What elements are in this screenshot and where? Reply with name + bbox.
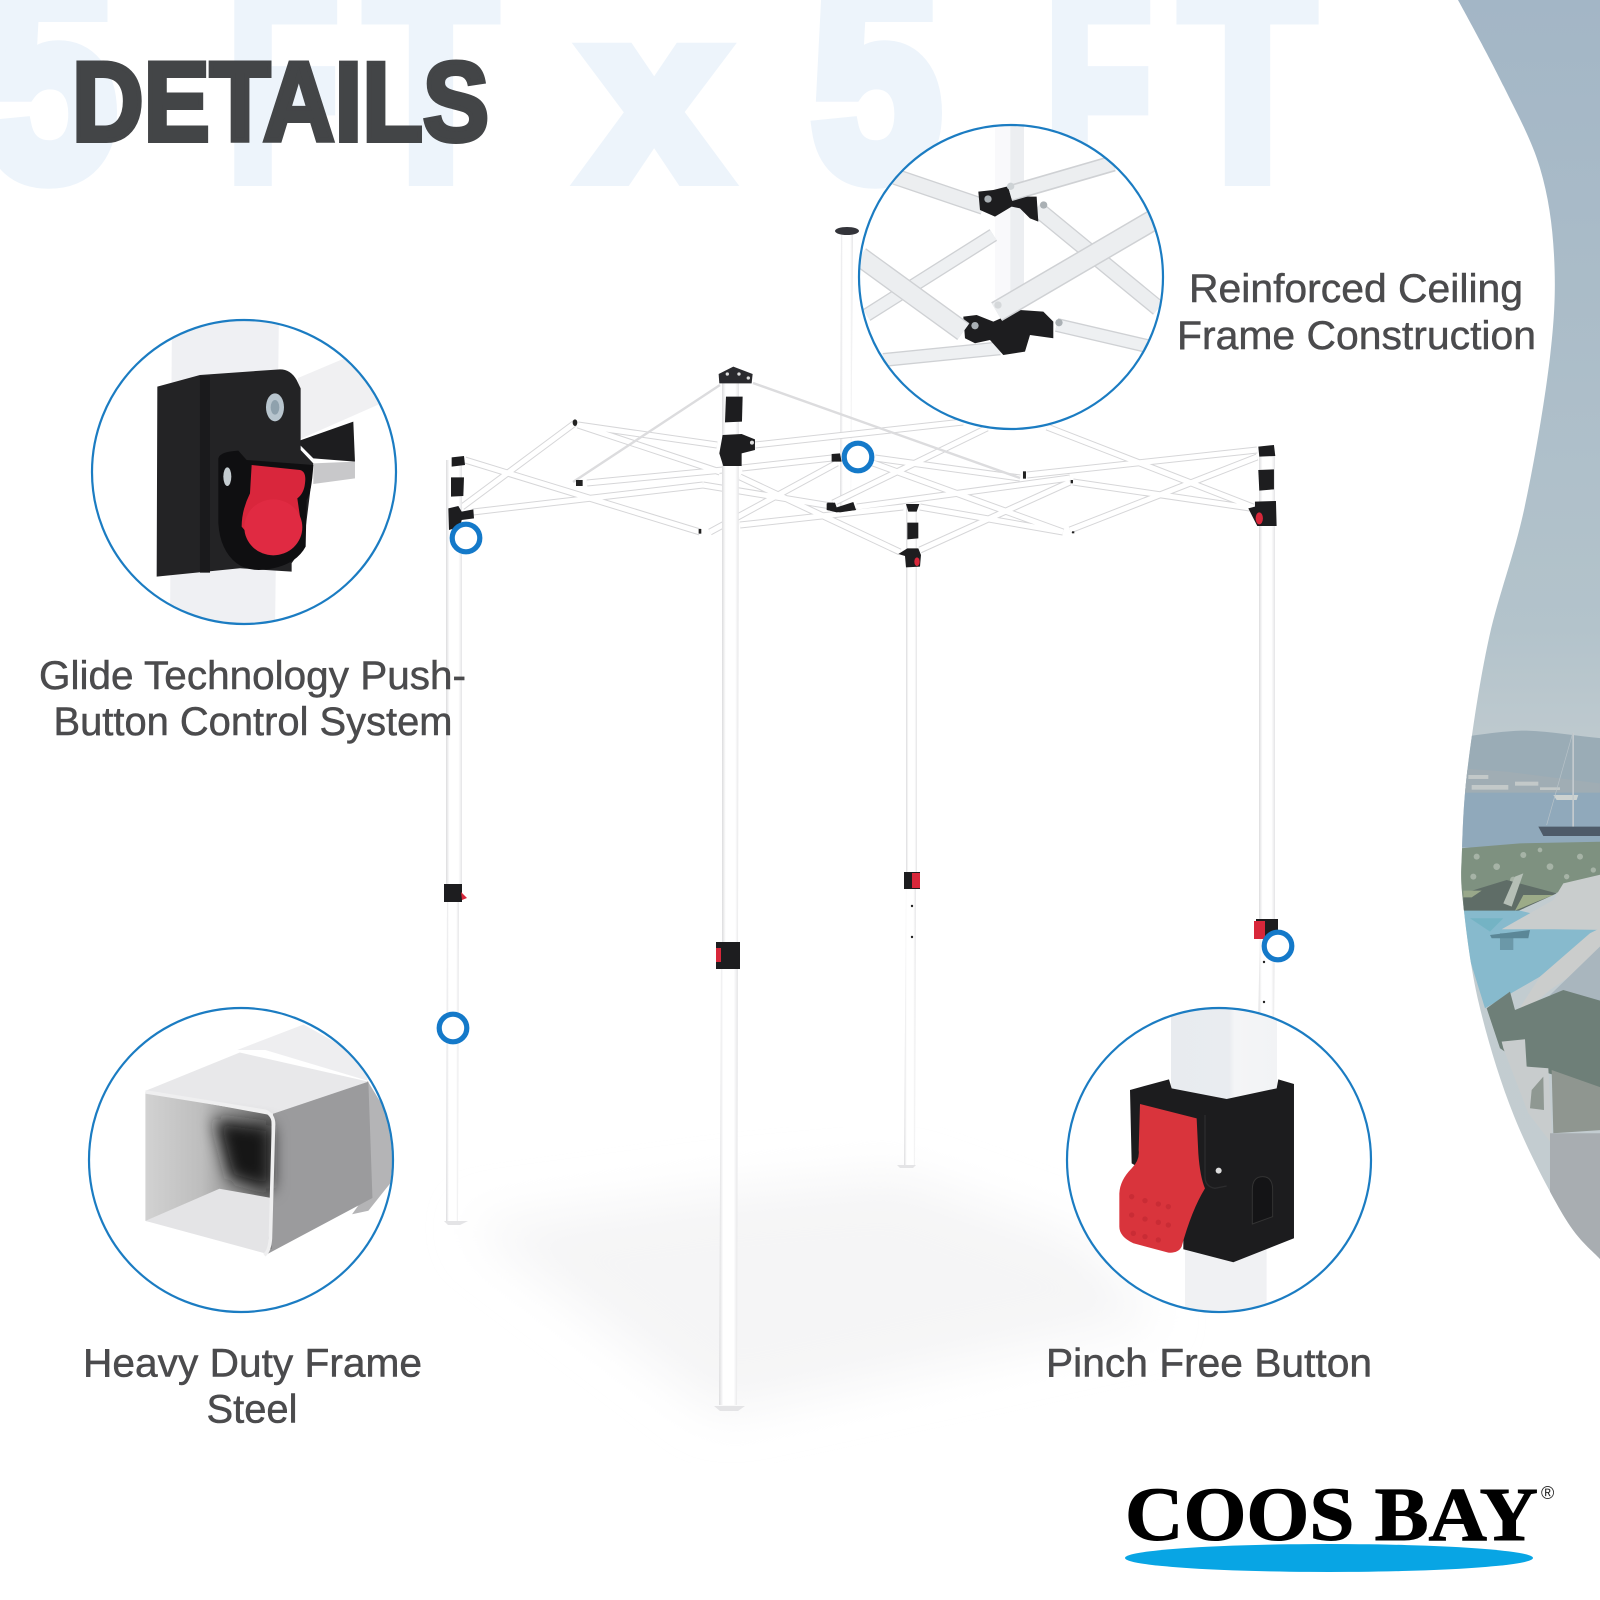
canopy frame illustration xyxy=(444,227,1278,1411)
back pole xyxy=(897,505,920,1168)
logo: COOS BAY: COOS BAY xyxy=(1125,1473,1538,1557)
marker ring: ceiling frame xyxy=(844,443,872,471)
background watermark: 5 FT x 5 FT xyxy=(0,0,1314,237)
detail lens: push-button control xyxy=(92,310,400,630)
detail lens: ceiling frame xyxy=(859,125,1163,429)
heading: DETAILS: DETAILS xyxy=(72,40,489,164)
black corner brackets, right part xyxy=(827,445,1277,567)
logo: COOS BAY: ® xyxy=(1541,1483,1554,1503)
detail lens: pinch free button xyxy=(1067,1007,1371,1312)
marker ring: frame steel xyxy=(439,1014,467,1042)
front-centre pole xyxy=(714,380,745,1411)
scissor truss members xyxy=(462,383,1257,552)
label: glide technology push-button control system xyxy=(39,654,466,744)
label: heavy duty frame steel xyxy=(83,1342,422,1432)
label: reinforced ceiling frame construction: Reinforced Ceiling xyxy=(1189,267,1523,311)
label: heavy duty frame steel: Heavy Duty Frame xyxy=(83,1342,422,1386)
ground shadow of canopy xyxy=(470,1175,1160,1415)
label: pinch free button: Pinch Free Button xyxy=(1046,1342,1372,1386)
detail lens: steel tube xyxy=(89,1008,395,1312)
label: glide technology push-button control system: Glide Technology Push- xyxy=(39,654,466,698)
front-left pole xyxy=(444,460,468,1225)
label: reinforced ceiling frame construction: Frame Construction xyxy=(1177,314,1536,358)
label: reinforced ceiling frame construction xyxy=(1177,267,1536,358)
back-left pole with centre knob xyxy=(835,227,859,512)
label: heavy duty frame steel: Steel xyxy=(206,1388,298,1432)
right pole xyxy=(1254,455,1278,1030)
marker ring: push-button xyxy=(452,524,480,552)
marker ring: pinch free button xyxy=(1264,932,1292,960)
label: glide technology push-button control system: Button Control System xyxy=(54,700,452,744)
panel: resort photo wave on right edge xyxy=(1458,0,1600,1259)
black corner brackets, left part xyxy=(448,367,856,534)
